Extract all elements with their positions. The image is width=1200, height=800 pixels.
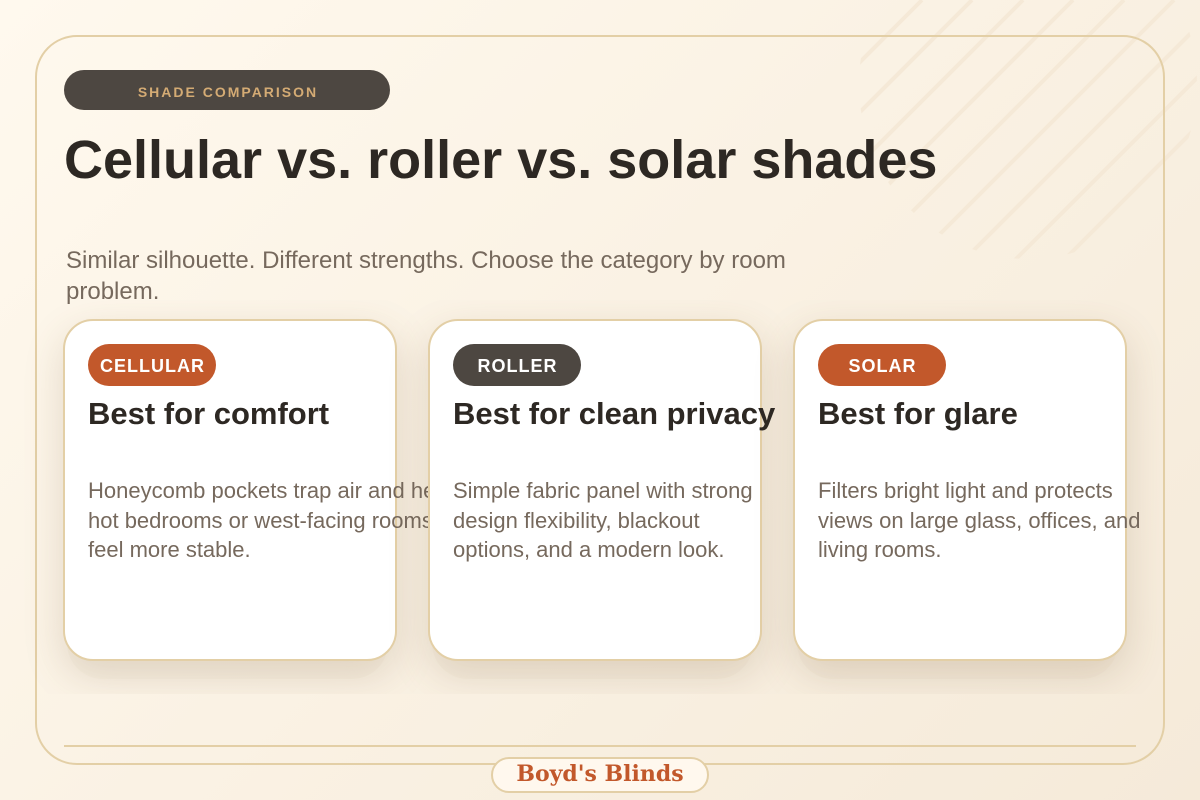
brand pill — [491, 757, 709, 793]
cellular description: Honeycomb pockets trap air and help — [88, 478, 452, 503]
cellular description: feel more stable. — [88, 537, 251, 562]
roller description: options, and a modern look. — [453, 537, 725, 562]
solar description: Filters bright light and protects — [818, 478, 1113, 503]
solar tag: SOLAR — [848, 356, 916, 376]
solar heading: Best for glare — [818, 396, 1018, 431]
eyebrow badge: SHADE COMPARISON — [138, 84, 318, 100]
cellular description: hot bedrooms or west-facing rooms — [88, 508, 433, 532]
subtitle: Similar silhouette. Different strengths. Choose the category by room problem. — [66, 247, 786, 305]
solar tag — [818, 344, 946, 386]
solar description: living rooms. — [818, 537, 941, 562]
solar description — [818, 478, 1140, 562]
roller description — [453, 478, 753, 562]
comparison cards — [48, 318, 1140, 688]
panel: roller card — [428, 319, 762, 661]
brand pill: Boyd's Blinds — [516, 761, 684, 787]
eyebrow badge — [64, 70, 390, 110]
roller description: design flexibility, blackout — [453, 508, 700, 532]
panel: cellular card — [63, 319, 397, 661]
cellular tag — [88, 344, 216, 386]
cellular description — [88, 478, 452, 562]
roller tag: ROLLER — [478, 356, 558, 376]
cellular heading: Best for comfort — [88, 396, 329, 431]
roller tag — [453, 344, 581, 386]
decorative diagonal stripes — [860, 0, 1196, 258]
solar description: views on large glass, offices, and — [818, 508, 1140, 532]
panel: solar card — [793, 319, 1127, 661]
cellular tag: CELLULAR — [100, 356, 205, 376]
title: Cellular vs. roller vs. solar shades — [64, 130, 937, 190]
roller description: Simple fabric panel with strong — [453, 478, 753, 503]
roller heading: Best for clean privacy — [453, 396, 775, 431]
footer rule — [64, 745, 1136, 747]
